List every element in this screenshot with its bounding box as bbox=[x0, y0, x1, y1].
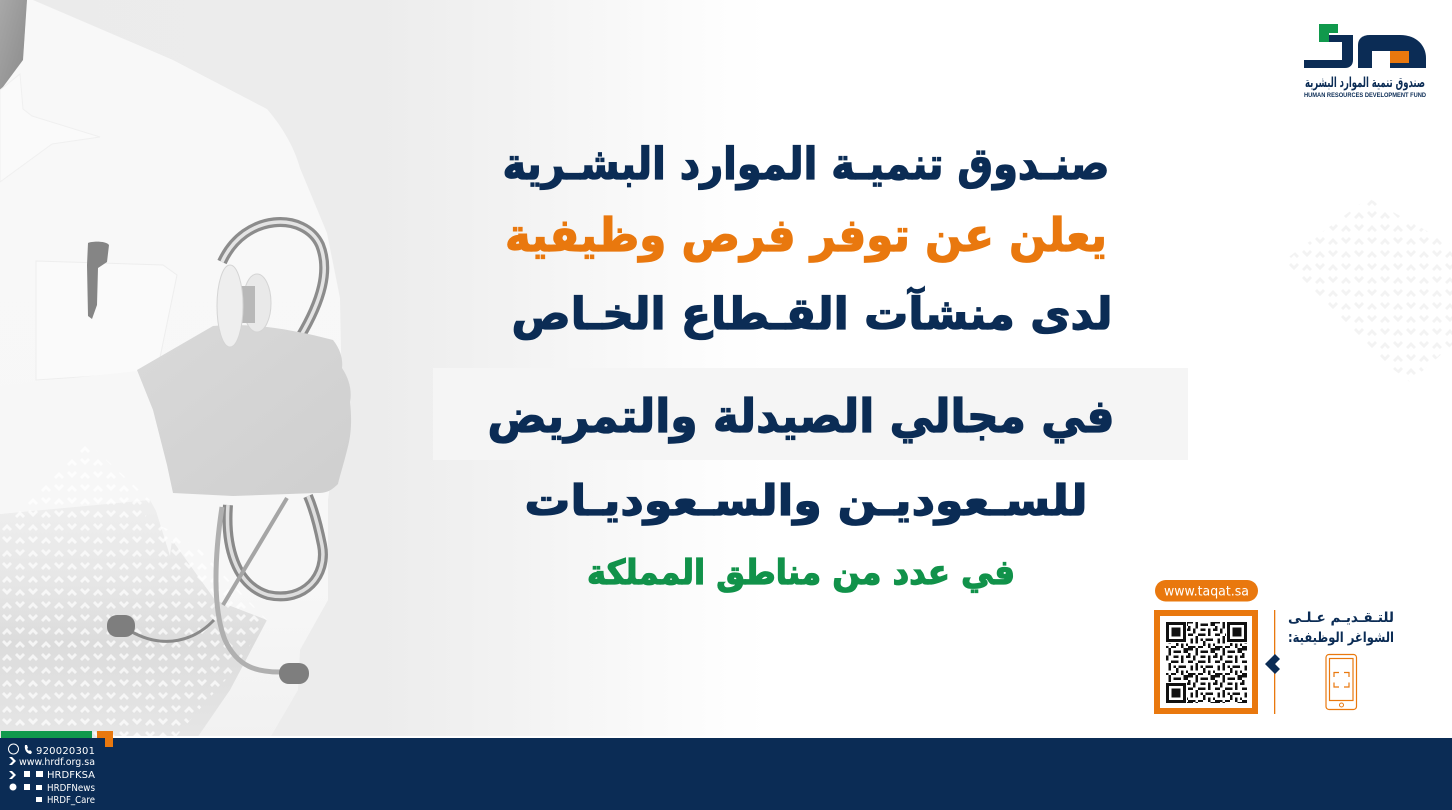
lower shadow area bbox=[0, 500, 267, 738]
HRDFKSA: HRDFKSA bbox=[47, 770, 95, 781]
line 2: يعلن عن توفر فرص وظيفية bbox=[505, 208, 1107, 262]
contact details bbox=[8, 744, 95, 806]
apply panel bbox=[1154, 580, 1394, 714]
green strip bbox=[1, 731, 92, 738]
arrow bbox=[1265, 654, 1280, 674]
qr code bbox=[1154, 610, 1258, 714]
line 6: في عدد من مناطق المملكة bbox=[587, 553, 1015, 593]
url pill bbox=[1155, 580, 1258, 602]
white coat bbox=[0, 0, 342, 738]
stethoscope tubes bbox=[132, 222, 324, 672]
line 1: صنـدوق تنميـة الموارد البشـرية bbox=[502, 139, 1110, 190]
apply text bbox=[1288, 610, 1394, 646]
apply text: الشواغر الوظيفية: bbox=[1288, 630, 1394, 646]
line 3: لدى منشآت القـطاع الخـاص bbox=[512, 286, 1112, 340]
logo bbox=[1304, 24, 1426, 99]
chest piece bbox=[217, 265, 271, 347]
doctor photo bbox=[0, 0, 351, 738]
logo english name: HUMAN RESOURCES DEVELOPMENT FUND bbox=[1304, 92, 1426, 99]
pocket bbox=[36, 261, 177, 380]
collar bbox=[0, 74, 100, 182]
icon: phone scan bbox=[1326, 654, 1356, 710]
url pill: www.taqat.sa bbox=[1164, 584, 1249, 600]
footer bar bbox=[0, 731, 1452, 810]
logo mark bbox=[1304, 24, 1426, 68]
HRDF_Care: HRDF_Care bbox=[47, 795, 95, 806]
line 4: في مجالي الصيدلة والتمريض bbox=[488, 389, 1114, 443]
glove bbox=[137, 325, 351, 496]
neck bbox=[0, 0, 27, 91]
phone: 920020301 bbox=[36, 746, 95, 757]
website: www.hrdf.org.sa bbox=[19, 757, 95, 768]
apply text: للتـقـديـم عـلـى bbox=[1288, 610, 1394, 626]
HRDFNews: HRDFNews bbox=[47, 783, 95, 794]
line 5: للسـعوديـن والسـعوديـات bbox=[524, 476, 1088, 526]
headline text bbox=[488, 139, 1114, 593]
divider line bbox=[1274, 610, 1275, 714]
sleeve bbox=[0, 371, 172, 556]
pen bbox=[87, 242, 109, 319]
highlight band bbox=[433, 368, 1188, 460]
ear tips bbox=[107, 615, 309, 684]
chevron pattern: left bbox=[0, 440, 267, 738]
chevron pattern: right bbox=[1282, 198, 1452, 382]
orange corner bbox=[97, 731, 113, 747]
